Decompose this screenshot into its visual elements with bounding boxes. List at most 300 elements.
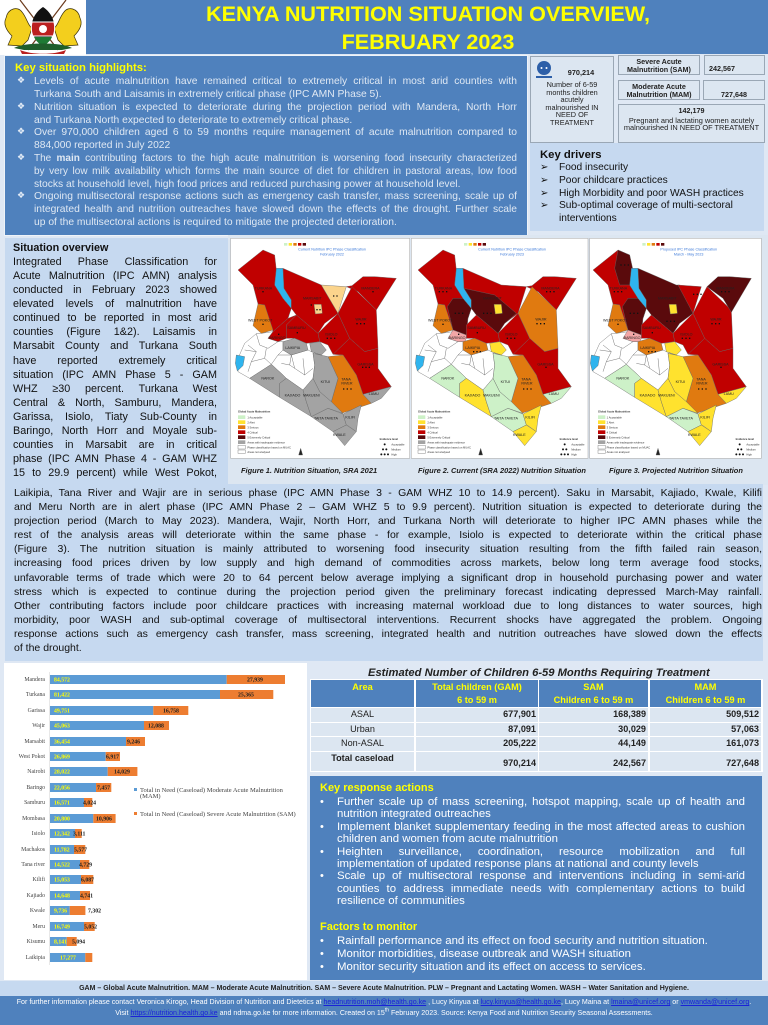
- panel: situation overview: Central & North, Samburu, Mandera,: [13, 397, 217, 409]
- map: figure 3 projected nutrition situation: MANDERA: [716, 286, 735, 290]
- bar chart: caseload by county: 12,342: [54, 832, 70, 838]
- panel: situation overview continued: and Meru North are in alert phase (IPC AMN Phase 2 – GAM WHZ 5 to 9.9 percent). Nutrition situation is expected to deteriorate during the: [14, 501, 762, 513]
- title: FEBRUARY 2023: [342, 28, 514, 54]
- bar chart: caseload by county: 5,052: [84, 924, 97, 930]
- map: figure 1 nutrition situation: [235, 243, 405, 456]
- panel: key situation highlights: ❖: [17, 126, 25, 136]
- panel: key response actions and factors to monitor: [310, 776, 762, 980]
- map: figure 3 projected nutrition situation: 2 Alert: [607, 420, 614, 424]
- stat label: moderate acute malnutrition: Moderate Acute: [632, 82, 686, 91]
- bar chart: caseload by county: 26,869: [54, 754, 70, 760]
- bar chart: caseload by county: 20,800: [54, 816, 70, 822]
- map: figure 2 current nutrition situation: TURKANA: [435, 286, 453, 290]
- map: figure 2 current nutrition situation: ISIOLO: [505, 333, 518, 337]
- map: figure 1 nutrition situation: BARINGO: [269, 336, 286, 340]
- bar chart: caseload by county: 7,457: [97, 786, 110, 792]
- map: figure 2 current nutrition situation: KITUI: [501, 380, 510, 384]
- panel: key situation highlights: and Turkana North expected to deteriorate to extremely critical phase.: [34, 115, 352, 126]
- bar chart: caseload by county: 6,087: [81, 878, 94, 884]
- panel: key response actions and factors to monitor: •: [320, 948, 324, 960]
- panel: key situation highlights: [5, 56, 527, 235]
- drivers list: interventions: [559, 213, 617, 224]
- panel: key response actions and factors to monitor: •: [320, 935, 324, 947]
- map: figure 3 projected nutrition situation: March - May 2023: [674, 253, 703, 257]
- map: figure 1 nutrition situation: KAJIADO: [285, 394, 300, 398]
- map: figure 1 nutrition situation: Areas with inadequate evidence: [247, 440, 286, 444]
- map: figure 2 current nutrition situation: WAJIR: [535, 317, 547, 321]
- caption: figure 2: Figure 2. Current (SRA 2022) Nutrition Situation: [418, 466, 586, 475]
- bar chart: caseload by county: 14,522: [54, 862, 70, 868]
- stat value: MAM: [703, 80, 765, 100]
- bar chart: caseload by county: 17,277: [60, 956, 76, 962]
- map: figure 2 current nutrition situation: LAIKIPIA: [465, 346, 481, 350]
- bar chart: caseload by county: 84,572: [54, 678, 70, 684]
- table: children requiring treatment: Non-ASAL: [341, 738, 384, 748]
- map: figure 3 projected nutrition situation: High: [746, 452, 752, 456]
- map: figure 2 current nutrition situation: Medium: [571, 447, 582, 451]
- table: children requiring treatment: [310, 679, 763, 772]
- map: figure 2 current nutrition situation: MAKUENI: [483, 394, 500, 398]
- table: children requiring treatment: 30,029: [618, 724, 646, 734]
- map: figure 3 projected nutrition situation: [590, 243, 760, 456]
- stat label: moderate acute malnutrition: Malnutrition (MAM): [626, 90, 692, 99]
- map: figure 3 projected nutrition situation: WAJIR: [710, 317, 722, 321]
- map: figure 1 nutrition situation: Global Acute Malnutrition: [238, 409, 271, 413]
- map: figure 3 projected nutrition situation: LAMU: [724, 392, 734, 396]
- map: figure 2 current nutrition situation: BARINGO: [449, 336, 466, 340]
- table: children requiring treatment: 509,512: [726, 709, 759, 719]
- logo: Kenya coat of arms: [0, 0, 86, 55]
- map: figure 1 nutrition situation: MARSABIT: [303, 297, 322, 301]
- panel: situation overview: phase (IPC AMN Phase 4 - GAM WHZ: [13, 453, 217, 465]
- map: figure 2 current nutrition situation: 5 Extremely Critical: [427, 435, 451, 439]
- map: figure 2 current nutrition situation: Evidence level: [560, 437, 578, 441]
- panel: situation overview continued: response actions such as emergency cash transfer, mass screening, integrated health and nutrition outreaches have slowed down the effects: [14, 628, 762, 640]
- bar chart: caseload by county: Kilifi: [32, 876, 45, 883]
- stat box: children in need of treatment: malnourished IN: [545, 102, 599, 112]
- bar chart: caseload by county: 9,736: [54, 908, 67, 914]
- map: figure 2 current nutrition situation: High: [571, 452, 577, 456]
- map: figure 1 nutrition situation: NAROK: [261, 377, 275, 381]
- stat label: moderate acute malnutrition: [618, 80, 700, 100]
- table: children requiring treatment: Area: [352, 682, 373, 692]
- bar chart: caseload by county: Kwale: [30, 908, 45, 914]
- panel: key situation highlights: 884,000 reported in July 2022: [34, 140, 170, 151]
- panel: situation overview continued: Laikipia, Tana River and Wajir are in serious phase (IPC AMN Phase 3 - GAM WHZ 10 to 14.9 percent). Saku in Marsabit, Kajiado, Kwale, Kilifi: [14, 487, 762, 499]
- bar chart: caseload by county: 3,111: [73, 832, 86, 838]
- bar chart: caseload by county: Turkana: [26, 692, 45, 698]
- map: figure 3 projected nutrition situation: 3 Serious: [607, 425, 619, 429]
- map: figure 3 projected nutrition situation: KWALE: [688, 433, 701, 437]
- bar chart: caseload by county: Marsabit: [24, 739, 45, 745]
- panel: key response actions and factors to monitor: Scale up of multisectoral response and interventions including in semi-arid: [337, 870, 745, 882]
- icon: child face: [536, 61, 552, 78]
- map: figure 2 current nutrition situation: WEST POKOT: [428, 318, 453, 322]
- drivers list: [540, 162, 744, 224]
- map: figure 2 current nutrition situation: February 2023: [500, 253, 524, 257]
- bar chart: caseload by county: 45,063: [54, 724, 70, 730]
- bar chart: caseload by county: Total in Need (Caseload) Moderate Acute Malnutrition: [140, 787, 284, 794]
- map: figure 3 projected nutrition situation: KAJIADO: [640, 394, 655, 398]
- map: figure 3 projected nutrition situation: TANA: [696, 377, 706, 381]
- panel: key situation highlights: Levels of acute malnutrition have remained critical to extremely critical in most arid counties with: [34, 76, 517, 87]
- panel: situation overview: WHZ ≥30 percent. Turkana West: [13, 383, 217, 395]
- bar chart: caseload by county: 36,454: [54, 740, 70, 746]
- map: figure 1 nutrition situation: Areas not analysed: [247, 450, 271, 454]
- header banner: [86, 0, 768, 54]
- map: figure 2 current nutrition situation: [415, 243, 585, 456]
- bar chart: caseload by county: 27,939: [247, 678, 263, 684]
- map: figure 2 current nutrition situation: SAMBURU: [467, 326, 486, 330]
- stat value: SAM: 242,567: [709, 64, 735, 73]
- bar chart: caseload by county: 5,094: [72, 940, 85, 946]
- panel: situation overview: Baringo, North Horr and Moyale sub-: [13, 425, 217, 437]
- map: figure 1 nutrition situation: TANA: [341, 377, 351, 381]
- map: figure 3 projected nutrition situation: Proposed IPC Phase Classification: [660, 247, 717, 251]
- map: figure 1 nutrition situation: Acceptable: [391, 442, 405, 446]
- bar chart: caseload by county: Kisumu: [27, 939, 45, 945]
- bar chart: caseload by county: 14,029: [114, 770, 130, 776]
- bar chart: caseload by county: Samburu: [24, 800, 45, 806]
- bar chart: caseload by county: West Pokot: [19, 754, 45, 760]
- table: children requiring treatment: 161,073: [726, 738, 759, 748]
- table: children requiring treatment: 87,091: [508, 724, 536, 734]
- table: children requiring treatment: 205,222: [503, 738, 536, 748]
- panel: key response actions and factors to monitor: implementation of updated response plans at national and county levels: [337, 858, 699, 870]
- table: children requiring treatment: 242,567: [613, 758, 646, 768]
- map: figure 2 current nutrition situation: TAITA TAVETA: [494, 417, 519, 421]
- map: figure 2 current nutrition situation: GARISSA: [537, 363, 554, 367]
- bar chart: caseload by county: Baringo: [26, 785, 45, 791]
- table: children requiring treatment: ASAL: [351, 709, 374, 719]
- panel: situation overview: situation (IPC AMN Phase 5 - GAM: [13, 369, 217, 381]
- map: figure 3 projected nutrition situation: 4 Critical: [607, 430, 617, 434]
- map: figure 3 projected nutrition situation: 1 Acceptable: [607, 415, 622, 419]
- map: figure 3 projected nutrition situation: NAROK: [616, 377, 630, 381]
- bar chart: caseload by county: 6,917: [106, 754, 119, 760]
- map: figure 3 projected nutrition situation: MAKUENI: [658, 394, 675, 398]
- bar chart: caseload by county: 16,749: [54, 924, 70, 930]
- stat box: children in need of treatment: TREATMENT: [550, 118, 594, 126]
- drivers list: ➢: [540, 162, 548, 173]
- panel: situation overview continued: projection period (March to May 2023). Mandera, Wajir, North Horr, and Turkana North will deteriorate to higher IPC AMN phases while the: [14, 515, 762, 527]
- stat box: pregnant and lactating women: [618, 104, 765, 143]
- stat value: SAM: [704, 55, 765, 75]
- bar chart: caseload by county: Kajiado: [27, 893, 45, 899]
- map: figure 3 projected nutrition situation: TAITA TAVETA: [669, 417, 694, 421]
- map: figure 1 nutrition situation: Current Nutrition IPC Phase Classification: [298, 247, 366, 251]
- situation overview heading: Situation overview: [13, 242, 108, 254]
- panel: key response actions and factors to monitor: Rainfall performance and its effect on food security and nutrition situation.: [337, 935, 708, 947]
- panel: key situation highlights: Ongoing multisectoral response actions such as emergency cash transfer, mass screening, scale up of: [34, 191, 517, 202]
- map: figure 1 nutrition situation: Evidence level: [380, 437, 398, 441]
- panel: key situation highlights: ❖: [17, 75, 25, 85]
- map: figure 3 projected nutrition situation: Global Acute Malnutrition: [598, 409, 631, 413]
- map: figure 1 nutrition situation: Phase classification based on MUAC: [247, 445, 291, 449]
- table: children requiring treatment: Children 6 to 59 m: [666, 695, 745, 705]
- map: figure 2 current nutrition situation: Global Acute Malnutrition: [418, 409, 451, 413]
- stat label: severe acute malnutrition: Malnutrition (SAM): [627, 65, 691, 74]
- drivers list: Sub-optimal coverage of multi-sectoral: [559, 200, 733, 211]
- table: children requiring treatment: 727,648: [726, 758, 759, 768]
- table: children requiring treatment: 677,901: [503, 709, 536, 719]
- bar chart: caseload by county: 11,782: [54, 848, 70, 854]
- table: children requiring treatment: Children 6 to 59 m: [554, 695, 633, 705]
- panel: situation overview: counties in Marsabit are in critical: [13, 439, 217, 451]
- caption: figure 1: Figure 1. Nutrition Situation, SRA 2021: [241, 466, 377, 475]
- panel: situation overview continued: unfavorable terms of trade which were 20 to 64 percent below average implying a significant drop in household purchasing power and water: [14, 572, 762, 584]
- bar chart: caseload by county: 16,571: [54, 800, 70, 806]
- bar chart: caseload by county: Machakos: [21, 847, 46, 853]
- footer: contact information: Visit https://nutrition.health.go.ke and ndma.go.ke for more information. Created on 15th February 2023. Source: Kenya Food and Nutrition Security Seasonal Assessments.: [115, 1008, 653, 1017]
- panel: key response actions and factors to monitor: Heighten surveillance, coordination, resource mobilization and full: [337, 846, 745, 858]
- panel: situation overview continued: stress which is expected to continue during the projection period given the preliminary forecast indicating depressed March-May rainfall.: [14, 586, 762, 598]
- map: figure 1 nutrition situation: MANDERA: [361, 286, 380, 290]
- panel: key situation highlights: ❖: [17, 152, 25, 162]
- map: figure 1 nutrition situation: SAMBURU: [287, 326, 306, 330]
- panel: situation overview: conducted in February 2023 showed: [13, 284, 217, 296]
- panel: key situation highlights: by very low milk availability which forms the main source of diet for children in pastoral areas, low food: [34, 166, 517, 177]
- panel: situation overview: Acute Malnutrition (IPC AMN) analysis: [13, 270, 217, 282]
- bar chart: caseload by county: 4,741: [80, 894, 93, 900]
- panel: situation overview: continued to be reported in most arid: [13, 312, 217, 324]
- map: figure 1 nutrition situation: MAKUENI: [303, 394, 320, 398]
- map: figure 2 current nutrition situation: 1 Acceptable: [427, 415, 443, 419]
- map: figure 2 current nutrition situation: TANA: [521, 377, 531, 381]
- panel: key response actions and factors to monitor: nutrition integrated outreaches: [337, 808, 491, 820]
- panel: key response actions and factors to monitor: resilience of communities: [337, 895, 465, 907]
- map: figure 3 projected nutrition situation: KILIFI: [700, 416, 710, 420]
- map: figure 3 projected nutrition situation: Phase classification based on MUAC: [607, 445, 650, 449]
- map: figure 3 projected nutrition situation: MARSABIT: [658, 297, 677, 301]
- bar chart: caseload by county: 7,302: [88, 908, 101, 914]
- map: figure 2 current nutrition situation: Current Nutrition IPC Phase Classification: [478, 247, 546, 251]
- caption: figure 3: Figure 3. Projected Nutrition Situation: [609, 466, 743, 475]
- map: figure 3 projected nutrition situation: Acceptable: [746, 442, 760, 446]
- bar chart: caseload by county: Total in Need (Caseload) Severe Acute Malnutrition (SAM): [140, 811, 296, 818]
- stat value: MAM: 727,648: [721, 90, 747, 99]
- stat box: children in need of treatment: acutely: [560, 95, 584, 104]
- bar chart: caseload by county: Laikipia: [26, 955, 45, 961]
- map: figure 2 current nutrition situation: NAROK: [441, 377, 455, 381]
- map: figure 1 nutrition situation: February 2022: [320, 253, 344, 257]
- highlights heading: Key situation highlights:: [15, 62, 147, 74]
- panel: situation overview continued: (Figure 3). The nutrition situation is mainly attributed to worsening food insecurity situation resulting from the fifth failed rain season,: [14, 543, 762, 555]
- map: figure 3 projected nutrition situation: BARINGO: [624, 336, 641, 340]
- table: children requiring treatment: 970,214: [503, 758, 536, 768]
- bar chart: caseload by county: Meru: [32, 924, 45, 930]
- map: figure 3 projected nutrition situation: KITUI: [676, 380, 685, 384]
- map: figure 1 nutrition situation: Medium: [391, 447, 402, 451]
- glossary strip: [0, 981, 768, 996]
- map: figure 3 projected nutrition situation: Medium: [746, 447, 757, 451]
- drivers list: Food insecurity: [559, 162, 628, 173]
- bar chart: caseload by county: Mandera: [24, 677, 45, 683]
- map: figure 3 projected nutrition situation: GARISSA: [712, 363, 729, 367]
- drivers list: Poor childcare practices: [559, 175, 668, 186]
- panel: situation overview continued: rest of the analysis areas will deteriorate within the same phase - for example, Isiolo is expected to deteriorate within the critical phase: [14, 529, 762, 541]
- panel: key situation highlights: The main contributing factors to the high acute malnutrition is worsening food insecurity characterized: [34, 153, 517, 164]
- panel: situation overview continued: [5, 484, 763, 661]
- panel: key situation highlights: Turkana South and Laisamis in extremely critical phase (IPC AMN Phase 5).: [34, 89, 382, 100]
- bar chart: caseload by county: [4, 663, 307, 980]
- map: figure 1 nutrition situation: TURKANA: [255, 286, 273, 290]
- map: figure 1 nutrition situation: GARISSA: [357, 363, 374, 367]
- map: figure 1 nutrition situation: RIVER: [341, 382, 353, 386]
- map: figure 2 current nutrition situation: Phase classification based on MUAC: [427, 445, 471, 449]
- panel: key drivers: [530, 143, 764, 231]
- map: figure 3 projected nutrition situation: RIVER: [696, 382, 708, 386]
- stat label: severe acute malnutrition: [618, 55, 700, 75]
- panel: key situation highlights: ❖: [17, 190, 25, 200]
- map: figure 3 projected nutrition situation: Areas with inadequate evidence: [607, 440, 645, 444]
- bar chart: caseload by county: 4,729: [79, 862, 92, 868]
- bar chart: caseload by county: 22,056: [54, 786, 70, 792]
- map: figure 2 current nutrition situation: 4 Critical: [427, 430, 438, 434]
- bar chart: caseload by county: 12,088: [148, 724, 164, 730]
- panel: situation overview continued: of the drought.: [14, 642, 82, 654]
- map: figure 1 nutrition situation: TAITA TAVETA: [314, 417, 339, 421]
- map: figure 2 current nutrition situation: MANDERA: [541, 286, 560, 290]
- bar chart: caseload by county: 14,648: [54, 894, 70, 900]
- map: figure 1 nutrition situation: 1 Acceptable: [247, 415, 263, 419]
- panel: situation overview: elevated levels of malnutrition have: [13, 298, 217, 310]
- stat box: children in need of treatment: months children: [546, 88, 598, 96]
- bar chart: caseload by county: 4,024: [83, 800, 96, 806]
- map: figure 3 projected nutrition situation: Evidence level: [736, 437, 754, 441]
- bar chart: caseload by county: Nairobi: [27, 769, 45, 775]
- bar chart: caseload by county: Mombasa: [22, 816, 45, 822]
- bar chart: caseload by county: 10,906: [96, 816, 112, 822]
- map: figure 2 current nutrition situation: Areas with inadequate evidence: [427, 440, 466, 444]
- table: children requiring treatment: 168,389: [613, 709, 646, 719]
- panel: key situation highlights: Over 970,000 children aged 6 to 59 months require management of acute malnutrition compared to: [34, 127, 517, 138]
- panel: key response actions and factors to monitor: •: [320, 961, 324, 973]
- panel: key response actions and factors to monitor: •: [320, 821, 324, 833]
- map: figure 3 projected nutrition situation: 5 Extremely Critical: [607, 435, 630, 439]
- map: figure 1 nutrition situation: KWALE: [333, 433, 346, 437]
- panel: key situation highlights: up of the multisectoral actions is required to mitigate the projected deterioration.: [34, 217, 397, 228]
- map: figure 1 nutrition situation: High: [391, 452, 397, 456]
- map: figure 1 nutrition situation: WEST POKOT: [248, 318, 273, 322]
- panel: key situation highlights: ❖: [17, 101, 25, 111]
- panel: situation overview: [5, 238, 229, 484]
- panel: key response actions and factors to monitor: •: [320, 870, 324, 882]
- factors to monitor heading: Factors to monitor: [320, 921, 417, 933]
- panel: key response actions and factors to monitor: •: [320, 846, 324, 858]
- panel: key response actions and factors to monitor: Monitor security situation and its effect on access to services.: [337, 961, 646, 973]
- bar chart: caseload by county: Isiolo: [32, 831, 45, 837]
- panel: situation overview: Integrated Phase Classification for: [13, 256, 217, 268]
- panel: maps: [228, 235, 762, 484]
- bar chart: caseload by county: 9,246: [127, 740, 140, 746]
- map: figure 2 current nutrition situation: 3 Serious: [427, 425, 439, 429]
- panel: situation overview: counties (Figure 1&2). Laisamis in: [13, 326, 217, 338]
- footer: contact information: For further information please contact Veronica Kirogo, Head Division of Nutrition and Dietetics at headnutrition.moh@health.go.ke , Lucy Kinyua at lucy.kinyua@health.go.ke, Lucy Maina at lmaina@unicef.org or vmwanda@unicef.org.: [17, 998, 751, 1006]
- panel: situation overview continued: increasing food prices driven by low supply and high demand of commodities across markets, below long term average food stocks,: [14, 557, 762, 569]
- map: figure 1 nutrition situation: LAMU: [369, 392, 379, 396]
- drivers list: High Morbidity and poor WASH practices: [559, 188, 744, 199]
- map: figure 3 projected nutrition situation: ISIOLO: [680, 333, 693, 337]
- glossary strip: GAM – Global Acute Malnutrition. MAM – Moderate Acute Malnutrition. SAM – Severe Acute Malnutrition. PLW – Pregnant and Lactating Women. WASH – Water Sanitation and Hygiene.: [79, 985, 689, 992]
- panel: key response actions and factors to monitor: Further scale up of mass screening, hotspot mapping, scale up of health and: [337, 796, 745, 808]
- table: children requiring treatment: Total caseload: [331, 753, 394, 763]
- map: figure 1 nutrition situation: KILIFI: [345, 416, 355, 420]
- drivers list: ➢: [540, 175, 548, 186]
- map: figure 1 nutrition situation: 3 Serious: [247, 425, 259, 429]
- map: figure 2 current nutrition situation: KWALE: [513, 433, 526, 437]
- panel: key response actions and factors to monitor: children and women from acute malnutrition: [337, 833, 558, 845]
- bar chart: caseload by county: 49,751: [54, 708, 70, 714]
- bar chart: caseload by county: 5,577: [74, 848, 87, 854]
- stat box: children in need of treatment: Number of 6-59: [547, 80, 597, 89]
- map: figure 1 nutrition situation: 2 Alert: [247, 420, 255, 424]
- bar chart: caseload by county: Wajir: [32, 723, 45, 729]
- table: children requiring treatment: 6 to 59 m: [457, 695, 497, 705]
- map: figure 1 nutrition situation: KITUI: [321, 380, 330, 384]
- bar chart: caseload by county: 81,422: [54, 692, 70, 698]
- panel: key response actions and factors to monitor: counties to address immediate needs with complementary actions to build: [337, 883, 745, 895]
- map: figure 3 projected nutrition situation: WEST POKOT: [603, 318, 628, 322]
- map: figure 2 current nutrition situation: Areas not analysed: [427, 450, 451, 454]
- bar chart: caseload by county: Garissa: [28, 708, 45, 714]
- table: children requiring treatment: MAM: [695, 682, 716, 692]
- map: figure 1 nutrition situation: ISIOLO: [325, 333, 338, 337]
- map: figure 3 projected nutrition situation: Areas not analysed: [607, 450, 630, 454]
- stat box: children in need of treatment: [530, 56, 614, 143]
- bar chart: caseload by county: 16,758: [163, 708, 179, 714]
- map: figure 2 current nutrition situation: MARSABIT: [483, 297, 502, 301]
- panel: key response actions and factors to monitor: Monitor morbidities, disease outbreak and WASH situation: [337, 948, 631, 960]
- map: figure 2 current nutrition situation: KILIFI: [525, 416, 535, 420]
- panel: situation overview: have reported extremely critical: [13, 355, 217, 367]
- panel: key response actions and factors to monitor: •: [320, 796, 324, 808]
- bar chart: caseload by county: 28,022: [54, 770, 70, 776]
- panel: key situation highlights: integrated health and nutrition outreaches have slowed down the effects of the drought. Further scale: [34, 204, 517, 215]
- table title: Estimated Number of Children 6-59 Months Requiring Treatment: [368, 667, 710, 679]
- map: figure 3 projected nutrition situation: TURKANA: [610, 286, 628, 290]
- key drivers heading: Key drivers: [540, 149, 602, 161]
- bar chart: caseload by county: 8,141: [54, 940, 67, 946]
- panel: key situation highlights: Nutrition situation is expected to deteriorate during the projection period with Mandera, North Horr: [34, 102, 517, 113]
- stat box: pregnant and lactating women: 142,179: [678, 106, 704, 115]
- map: figure 2 current nutrition situation: 2 Alert: [427, 420, 435, 424]
- stat box: pregnant and lactating women: Pregnant and lactating women acutely malnourished IN NEED OF TREATMENT: [624, 116, 759, 132]
- stat box: children in need of treatment: NEED OF: [556, 110, 588, 119]
- map: figure 1 nutrition situation: WAJIR: [355, 317, 367, 321]
- title: KENYA NUTRITION SITUATION OVERVIEW,: [206, 1, 650, 26]
- stat box: children in need of treatment: 970,214: [568, 68, 594, 77]
- panel: situation overview: 15 to 29.9 percent) while West Pokot,: [13, 467, 217, 479]
- table: children requiring treatment: Urban: [350, 724, 375, 734]
- panel: key situation highlights: stocks at household level, high food prices and reduced purchasing power at household level.: [34, 179, 460, 190]
- panel: situation overview: Marsabit County and Turkana South: [13, 340, 217, 352]
- title: [206, 1, 650, 54]
- map: figure 1 nutrition situation: 5 Extremely Critical: [247, 435, 271, 439]
- panel: situation overview continued: Other contributing factors include poor childcare practices with increasing maternal workload due to long distances to water sources, high: [14, 600, 762, 612]
- response actions heading: Key response actions: [320, 782, 434, 794]
- panel: key response actions and factors to monitor: Implement blanket supplementary feeding in the most affected areas to cushion: [337, 821, 745, 833]
- bar chart: caseload by county: 15,053: [54, 878, 70, 884]
- map: figure 2 current nutrition situation: KAJIADO: [465, 394, 480, 398]
- table: children requiring treatment: 44,149: [618, 738, 646, 748]
- map: figure 3 projected nutrition situation: LAIKIPIA: [640, 346, 656, 350]
- table: children requiring treatment: SAM: [583, 682, 604, 692]
- map: figure 2 current nutrition situation: LAMU: [549, 392, 559, 396]
- map: figure 3 projected nutrition situation: SAMBURU: [642, 326, 661, 330]
- bar chart: caseload by county: 25,365: [238, 692, 254, 698]
- map: figure 1 nutrition situation: LAIKIPIA: [285, 346, 301, 350]
